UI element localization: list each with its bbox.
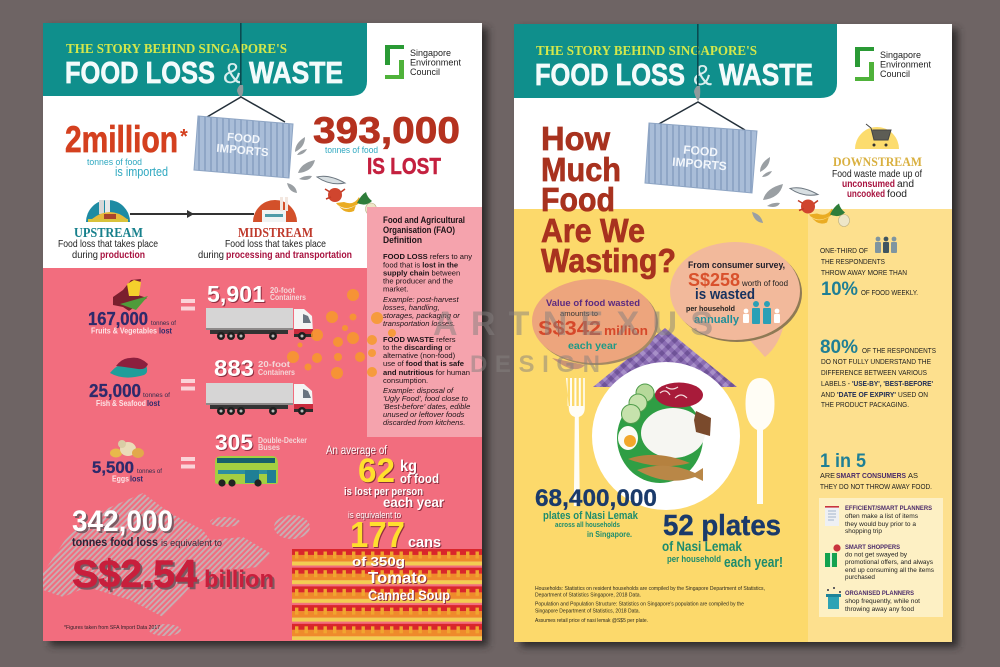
downstream: Food waste made up of xyxy=(832,169,922,180)
logo: Singapore Environment Council: Singapore xyxy=(410,48,451,59)
stat: one-third 10%: ONE-THIRD OF xyxy=(820,246,868,255)
stat: 62 kg and 177 cans: 177 xyxy=(350,514,405,555)
stat: 2 million imported: * xyxy=(180,126,188,148)
stat: 62 kg and 177 cans xyxy=(326,445,450,603)
footnotes: Department of Statistics Singapore, 2018 Data. xyxy=(535,592,641,598)
bubble: consumer survey: per household xyxy=(686,304,735,313)
panel: FAO definition: storages, packaging or xyxy=(383,311,460,320)
droplets xyxy=(287,137,315,193)
panel: smart consumer tips: shopping trip xyxy=(845,528,882,535)
stat: 80%: AND xyxy=(821,390,836,399)
stat: 52 plates: each year! xyxy=(724,554,783,571)
row: fruits and vegetables: 167,000 xyxy=(88,309,148,329)
logo: Singapore Environment Council: Environment xyxy=(410,58,461,68)
row: eggs: 5,500 xyxy=(92,458,134,477)
title: How Much Food Are We Wasting: Are We xyxy=(541,212,645,249)
panel: FAO definition: Example: disposal of xyxy=(383,386,454,395)
falling food xyxy=(790,188,850,226)
panel: FAO definition: FOOD LOSS refers to any xyxy=(383,252,472,261)
logo: Singapore Environment Council: Singapore xyxy=(880,50,921,61)
upstream label: Food loss that takes place xyxy=(58,238,158,250)
stat: 62 kg and 177 cans: kg xyxy=(400,458,417,475)
panel: smart consumer tips: EFFICIENT/SMART PLANNERS xyxy=(845,505,933,512)
stat: 62 kg and 177 cans: of 350g xyxy=(352,554,405,569)
panel: FAO definition: to the discarding or xyxy=(383,343,452,352)
stat: 393,000 lost: IS LOST xyxy=(367,153,441,179)
hanging food imports container: IMPORTS xyxy=(216,143,269,159)
midstream label xyxy=(198,225,352,261)
stat: 393,000 lost xyxy=(313,110,460,179)
stat: 1 in 5: AS xyxy=(908,471,918,480)
stat: 52 plates: 52 plates xyxy=(663,510,781,542)
bubble: value of food wasted xyxy=(532,279,658,369)
stat: one-third 10%: 10% xyxy=(821,279,858,300)
header band: & xyxy=(223,58,242,90)
stat: one-third 10%: OF FOOD WEEKLY. xyxy=(861,288,918,297)
row: eggs: lost xyxy=(130,474,143,484)
title: How Much Food Are We Wasting xyxy=(541,120,676,279)
row: fish and seafood: Containers xyxy=(258,368,295,377)
stat: 342,000 tonnes S$2.54 billion xyxy=(72,505,274,596)
stat: 2 million imported: is imported xyxy=(115,165,168,179)
panel: smart consumer tips: purchased xyxy=(845,574,875,581)
bubble: consumer survey: From consumer survey, xyxy=(688,260,785,270)
logo: Singapore Environment Council xyxy=(855,47,931,81)
upstream label xyxy=(58,225,158,261)
midstream label: Food loss that takes place xyxy=(225,238,326,250)
midstream label: processing and transportation xyxy=(226,249,352,261)
header band: THE STORY BEHIND SINGAPORE'S xyxy=(66,42,287,57)
panel: FAO definition: the producer and the xyxy=(383,277,453,286)
yellow section xyxy=(514,209,808,642)
footnotes: Assumes retail price of nasi lemak @S$5 per plate. xyxy=(535,618,648,624)
title: How Much Food Are We Wasting: Wasting? xyxy=(541,242,676,279)
stat: 62 kg and 177 cans: cans xyxy=(408,534,441,551)
watermark: Art Nexus Design: ARTNEXUS xyxy=(433,305,713,343)
icon: gift with cross xyxy=(825,544,841,567)
downstream: and xyxy=(897,179,914,190)
fork xyxy=(566,378,585,506)
icon: upstream farm xyxy=(86,200,130,222)
panel: FAO definition: use of food that is safe xyxy=(383,359,464,368)
icon: midstream factory xyxy=(253,197,297,222)
stat: 68,400,000 plates: in Singapore. xyxy=(587,529,632,539)
stat: 68,400,000 plates xyxy=(535,485,657,539)
panel: FAO definition: alternative (non-food) xyxy=(383,351,456,360)
panel: FAO definition: food that is lost in the xyxy=(383,260,458,270)
row: fruits and vegetables xyxy=(88,279,313,340)
row: fruits and vegetables: Containers xyxy=(270,293,306,302)
header band: WASTE xyxy=(249,55,343,90)
midstream label: during xyxy=(198,249,224,261)
icon: shopping list xyxy=(825,506,839,526)
row: eggs: tonnes of xyxy=(137,468,162,475)
bubble: value of food wasted: amounts to xyxy=(560,309,598,318)
panel: FAO definition xyxy=(367,207,482,437)
title: How Much Food Are We Wasting: How xyxy=(541,120,610,157)
watermark: Art Nexus Design: DESIGN xyxy=(470,351,600,378)
stat: 52 plates: per household xyxy=(667,554,721,564)
stat: 1 in 5 xyxy=(820,451,932,491)
footnote: *Figures taken from SFA Import Data 2017 xyxy=(64,625,160,631)
bubble: consumer survey xyxy=(670,242,802,357)
stat: 1 in 5: 1 in 5 xyxy=(820,451,866,472)
logo: Singapore Environment Council: Council xyxy=(410,67,440,78)
stat: 1 in 5: SMART CONSUMERS xyxy=(836,471,906,480)
stat: 80%: 80% xyxy=(820,337,858,358)
row: fish and seafood: tonnes of xyxy=(143,392,170,399)
header band: & xyxy=(693,60,712,92)
title: How Much Food Are We Wasting: Much xyxy=(541,151,621,188)
stat: 80% xyxy=(820,337,936,409)
header band xyxy=(43,23,367,96)
panel: FAO definition: transportation losses. xyxy=(383,319,455,328)
row: fish and seafood: 883 xyxy=(214,355,254,381)
stat: 342,000 tonnes S$2.54 billion: tonnes food loss xyxy=(72,535,158,549)
row: fish and seafood: Fish & Seafood xyxy=(96,398,146,408)
stat: 342,000 tonnes S$2.54 billion: billion xyxy=(204,566,274,593)
stat: 2 million imported xyxy=(65,119,188,179)
bubble: value of food wasted: million xyxy=(604,324,648,338)
header band: FOOD LOSS xyxy=(535,57,685,92)
stat: 52 plates xyxy=(662,510,783,571)
row: eggs: Buses xyxy=(258,443,281,452)
panel: FAO definition: 'Ugly Food', food close to xyxy=(383,394,468,403)
panel: smart consumer tips: shop frequently, while not xyxy=(845,598,920,605)
downstream: DOWNSTREAM xyxy=(833,154,922,169)
stat: 62 kg and 177 cans: 62 xyxy=(358,452,395,490)
panel: smart consumer tips: they would buy prior to a xyxy=(845,521,916,528)
stat: 68,400,000 plates: across all households xyxy=(555,522,620,529)
falling food xyxy=(317,176,376,215)
footnotes: Population and Population Structure: Statistics on Singapore's population are compiled by the xyxy=(535,602,744,608)
row: fruits and vegetables: 5,901 xyxy=(207,281,265,307)
bubble: value of food wasted: Value of food wasted xyxy=(546,298,640,309)
footnotes: Households: Statistics on resident households are compiled by the Singapore Department of Statistics, xyxy=(535,586,765,592)
stat: 80%: DIFFERENCE BETWEEN VARIOUS xyxy=(821,368,927,377)
right column background xyxy=(808,209,952,642)
stat: 62 kg and 177 cans: each year xyxy=(383,494,445,510)
hanging food imports container: IMPORTS xyxy=(672,155,727,173)
panel: FAO definition: losses, handling, xyxy=(383,303,440,312)
pink stats section xyxy=(43,268,482,641)
row: fish and seafood: lost xyxy=(147,398,160,408)
stat: 62 kg and 177 cans: An average of xyxy=(326,445,388,457)
stat: 80%: THE PRODUCT PACKAGING. xyxy=(821,400,909,409)
panel: smart consumer tips: promotional offers, and always xyxy=(845,559,934,566)
stat: 2 million imported: tonnes of food xyxy=(87,157,142,168)
stat: 393,000 lost: 393,000 xyxy=(313,110,460,151)
panel: left poster food loss xyxy=(43,23,482,641)
panel: smart consumer tips: ORGANISED PLANNERS xyxy=(845,590,915,597)
icon: shopping cart xyxy=(855,124,899,149)
panel: FAO definition: Food and Agricultural xyxy=(383,215,465,225)
footnotes: Singapore Department of Statistics, 2018 Data. xyxy=(535,608,640,614)
bubble: value of food wasted: S$342 xyxy=(538,318,601,340)
cans of soup block xyxy=(292,549,482,640)
stat: 80%: DO NOT FULLY UNDERSTAND THE xyxy=(821,357,931,366)
title: How Much Food Are We Wasting: Food xyxy=(541,181,615,218)
stat: 1 in 5: ARE xyxy=(820,471,835,480)
downstream: uncooked xyxy=(847,189,885,200)
row: eggs: 305 xyxy=(215,430,253,455)
bubble: consumer survey: worth of food xyxy=(741,278,788,288)
panel: FAO definition: Example: post-harvest xyxy=(383,295,459,304)
stat: 342,000 tonnes S$2.54 billion: is equivalent to xyxy=(161,538,222,549)
stat: 68,400,000 plates: plates of Nasi Lemak xyxy=(543,510,639,522)
icon: three people xyxy=(875,237,897,253)
upstream label: production xyxy=(100,249,145,261)
downstream: food xyxy=(887,189,907,200)
logo: Singapore Environment Council: Environment xyxy=(880,60,931,70)
stat: 62 kg and 177 cans: Tomato xyxy=(368,570,427,587)
panel: FAO definition: 'Best-before' dates, edible xyxy=(383,402,470,411)
panel: FAO definition: Definition xyxy=(383,235,422,245)
panel: smart consumer tips: end up consuming all the items xyxy=(845,567,935,574)
header band: FOOD LOSS xyxy=(65,55,215,90)
watermark: Art Nexus Design xyxy=(287,289,713,379)
stat: 80%: OF THE RESPONDENTS xyxy=(862,346,936,355)
bubble: consumer survey: is wasted xyxy=(695,286,755,303)
stat: 80%: 'USE-BY', 'BEST-BEFORE' xyxy=(852,379,933,388)
panel: smart consumer tips xyxy=(819,498,943,617)
row: eggs xyxy=(92,430,307,487)
logo: Singapore Environment Council: Council xyxy=(880,69,910,80)
logo: Singapore Environment Council xyxy=(385,45,461,79)
stat: 342,000 tonnes S$2.54 billion: 342,000 xyxy=(72,505,173,538)
bubble: value of food wasted: each year xyxy=(568,341,617,352)
panel: FAO definition: discarded from kitchens. xyxy=(383,418,465,427)
panel: FAO definition: supply chain between xyxy=(383,269,460,278)
panel: FAO definition: and nutritious for human xyxy=(383,368,470,377)
upstream to midstream arrow xyxy=(130,210,254,218)
row: fish and seafood: 25,000 xyxy=(89,381,141,401)
row: fruits and vegetables: 20-foot xyxy=(270,286,295,295)
downstream: unconsumed xyxy=(842,179,895,190)
icon: family xyxy=(743,301,780,324)
stat: 80%: LABELS - xyxy=(821,379,850,388)
stat: 1 in 5: THEY DO NOT THROW AWAY FOOD. xyxy=(820,482,932,491)
panel: smart consumer tips: often make a list of items xyxy=(845,513,919,520)
stat: 62 kg and 177 cans: is equivalent to xyxy=(348,510,401,520)
row: fruits and vegetables: lost xyxy=(159,326,172,336)
midstream label: MIDSTREAM xyxy=(238,225,313,240)
header band: WASTE xyxy=(719,57,813,92)
row: fruits and vegetables: tonnes of xyxy=(151,320,176,327)
row: eggs: Double-Decker xyxy=(258,436,307,445)
stat: one-third 10% xyxy=(820,237,918,300)
panel: smart consumer tips: SMART SHOPPERS xyxy=(845,544,901,551)
header band: THE STORY BEHIND SINGAPORE'S xyxy=(536,44,757,59)
hanging food imports container: FOOD xyxy=(226,132,261,146)
stat: 2 million imported: 2million xyxy=(65,119,178,160)
downstream xyxy=(832,124,922,200)
footnotes xyxy=(535,586,765,624)
stat: one-third 10%: THE RESPONDENTS xyxy=(821,257,885,266)
stat: 393,000 lost: tonnes of food xyxy=(325,145,378,155)
hanging food imports container xyxy=(194,23,293,178)
napkin xyxy=(593,328,737,387)
row: fish and seafood: 20-foot xyxy=(258,360,290,369)
icon: double-decker bus xyxy=(215,456,278,487)
stat: 80%: 'DATE OF EXPIRY' xyxy=(837,390,896,399)
header band xyxy=(514,24,837,98)
panel: FAO definition: Organisation (FAO) xyxy=(383,225,455,235)
hanging food imports container xyxy=(645,24,757,193)
panel: FAO definition: consumption. xyxy=(383,376,428,385)
row: eggs: Eggs xyxy=(112,474,129,484)
panel: FAO definition: unused or leftover foods xyxy=(383,410,465,419)
stat: 68,400,000 plates: 68,400,000 xyxy=(535,485,657,512)
bubble: consumer survey: annually xyxy=(694,314,740,326)
stat: 342,000 tonnes S$2.54 billion: S$2.54 xyxy=(72,553,197,596)
stat: 62 kg and 177 cans: Canned Soup xyxy=(368,587,450,603)
row: fruits and vegetables: Fruits & Vegetables xyxy=(91,326,157,336)
stat: 62 kg and 177 cans: of food xyxy=(400,471,439,486)
upstream label: UPSTREAM xyxy=(74,225,143,240)
stat: one-third 10%: THROW AWAY MORE THAN xyxy=(821,268,907,277)
stat: 62 kg and 177 cans: is lost per person xyxy=(344,486,423,498)
spoon xyxy=(746,378,774,504)
panel: FAO definition: FOOD WASTE refers xyxy=(383,335,456,344)
panel: right poster how much food are we wasting xyxy=(514,24,952,642)
panel: FAO definition: market. xyxy=(383,285,408,294)
upstream label: during xyxy=(72,249,98,261)
map of Singapore stripes xyxy=(43,493,310,636)
icon: open gift box xyxy=(826,587,841,609)
droplets xyxy=(752,157,783,223)
row: fish and seafood xyxy=(89,355,313,415)
stat: 80%: USED ON xyxy=(898,390,928,399)
panel: smart consumer tips: do not get swayed by xyxy=(845,552,908,558)
bubble: consumer survey: S$258 xyxy=(688,270,740,290)
nasi lemak plate xyxy=(592,362,740,510)
stat: 52 plates: of Nasi Lemak xyxy=(662,538,742,554)
hanging food imports container: FOOD xyxy=(683,143,719,160)
panel: smart consumer tips: throwing away any food xyxy=(845,606,914,613)
